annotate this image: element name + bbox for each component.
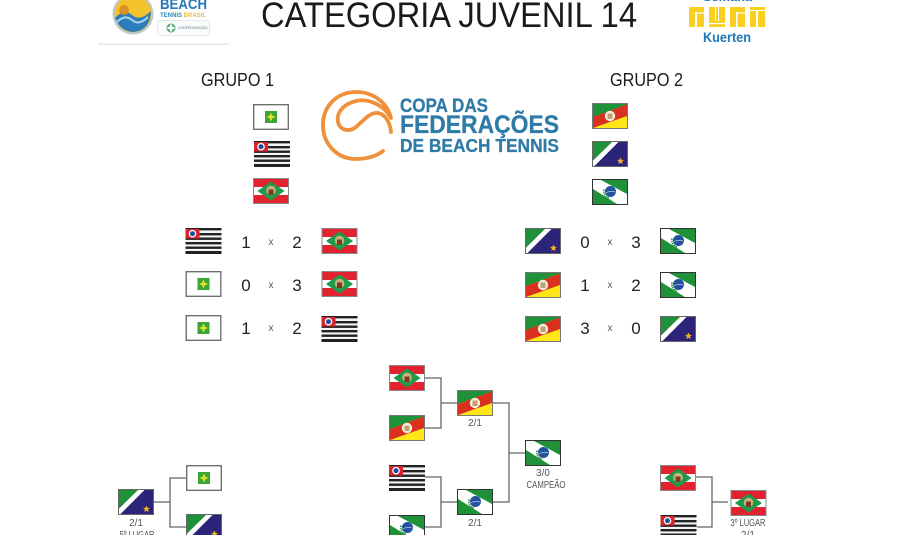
logo: Semana Guga Kuerten xyxy=(689,0,765,45)
match: RS 3 x 0 MS: 0 xyxy=(631,319,641,338)
flag: Distrito Federal xyxy=(187,466,221,490)
logo: Beach Tennis Brasil: CONFEDERAÇÃO xyxy=(178,25,208,30)
finalist: Paraná: 2/1 xyxy=(468,518,482,529)
flag: Paraná xyxy=(592,179,628,205)
logo: Copa das Federações de Beach Tennis: FEDERAÇÕES xyxy=(400,109,559,139)
match: DF 1 x 2 SP xyxy=(186,316,358,342)
match: DF 0 x 3 SC: 0 xyxy=(241,276,251,295)
match: RS 3 x 0 MS: x xyxy=(608,323,612,334)
match: MS 0 x 3 PR: 0 xyxy=(580,233,590,252)
flag: São Paulo xyxy=(254,141,290,167)
match: RS 3 x 0 MS: 3 xyxy=(580,319,590,338)
logo: Semana Guga Kuerten: Kuerten xyxy=(703,30,751,45)
5th place: Mato Grosso do Sul xyxy=(118,489,154,535)
flag: Distrito Federal xyxy=(254,105,288,129)
flag: Santa Catarina xyxy=(253,178,289,204)
match: RS 3 x 0 MS xyxy=(525,316,696,342)
heading: group 1: GRUPO 1 xyxy=(201,70,274,90)
match: DF 0 x 3 SC: x xyxy=(268,280,274,291)
match: MS 0 x 3 PR: x xyxy=(608,237,612,248)
match: MS 0 x 3 PR: 3 xyxy=(631,233,641,252)
match: RS 1 x 2 PR: x xyxy=(608,280,612,291)
finalist: Rio Grande do Sul: 2/1 xyxy=(468,418,482,429)
flag: São Paulo xyxy=(660,515,696,535)
panel: group 2 matches xyxy=(525,228,696,342)
logo: Copa das Federações de Beach Tennis: DE BEACH TENNIS xyxy=(400,136,559,156)
logo: Beach Tennis Brasil xyxy=(98,0,229,45)
semifinal flag: São Paulo xyxy=(389,465,425,491)
panel: 3rd place bracket xyxy=(660,465,766,535)
logo: Beach Tennis Brasil: TENNIS BRASIL xyxy=(160,12,206,19)
semifinal flag: Santa Catarina xyxy=(389,365,425,391)
match: DF 1 x 2 SP: 2 xyxy=(292,319,302,338)
match: DF 0 x 3 SC xyxy=(186,271,358,297)
champion: Paraná: 3/0 xyxy=(536,468,550,479)
panel: group 1 matches xyxy=(186,228,358,342)
panel: main bracket xyxy=(389,365,566,535)
match: MS 0 x 3 PR xyxy=(525,228,696,254)
match: RS 1 x 2 PR: 1 xyxy=(580,276,590,295)
bracket lines xyxy=(425,378,525,527)
match: RS 1 x 2 PR xyxy=(525,272,696,298)
finalist: Paraná xyxy=(457,489,493,529)
panel: group 1 list xyxy=(201,70,290,204)
match: DF 1 x 2 SP: 1 xyxy=(241,319,251,338)
match: SP 1 x 2 SC: 2 xyxy=(292,233,302,252)
3rd place: Santa Catarina: 3º LUGAR xyxy=(730,518,766,529)
flag: Rio Grande do Sul xyxy=(592,103,628,129)
flag: Mato Grosso do Sul xyxy=(592,141,628,167)
logo: Copa das Federações de Beach Tennis xyxy=(323,92,559,159)
champion: Paraná xyxy=(525,440,566,491)
flag: Santa Catarina xyxy=(660,465,696,491)
5th place: Mato Grosso do Sul: 2/1 xyxy=(129,518,143,529)
bracket lines xyxy=(154,478,186,527)
match: SP 1 x 2 SC: x xyxy=(268,237,274,248)
heading: group 2: GRUPO 2 xyxy=(610,70,683,90)
logo: Copa das Federações de Beach Tennis: COPA DAS xyxy=(400,95,488,117)
panel: 5th place bracket xyxy=(118,466,222,535)
3rd place: Santa Catarina xyxy=(730,490,766,535)
flag: Mato Grosso do Sul xyxy=(186,514,222,535)
finalist: Rio Grande do Sul xyxy=(457,390,493,429)
bracket lines xyxy=(696,477,728,527)
match: DF 0 x 3 SC: 3 xyxy=(292,276,302,295)
match: DF 1 x 2 SP: x xyxy=(268,323,274,334)
match: SP 1 x 2 SC xyxy=(186,228,358,254)
semifinal flag: Paraná xyxy=(389,515,425,535)
champion: Paraná: CAMPEÃO xyxy=(526,478,566,491)
panel: group 2 list xyxy=(592,70,683,205)
match: SP 1 x 2 SC: 1 xyxy=(241,233,251,252)
match: RS 1 x 2 PR: 2 xyxy=(631,276,641,295)
semifinal flag: Rio Grande do Sul xyxy=(389,415,425,441)
